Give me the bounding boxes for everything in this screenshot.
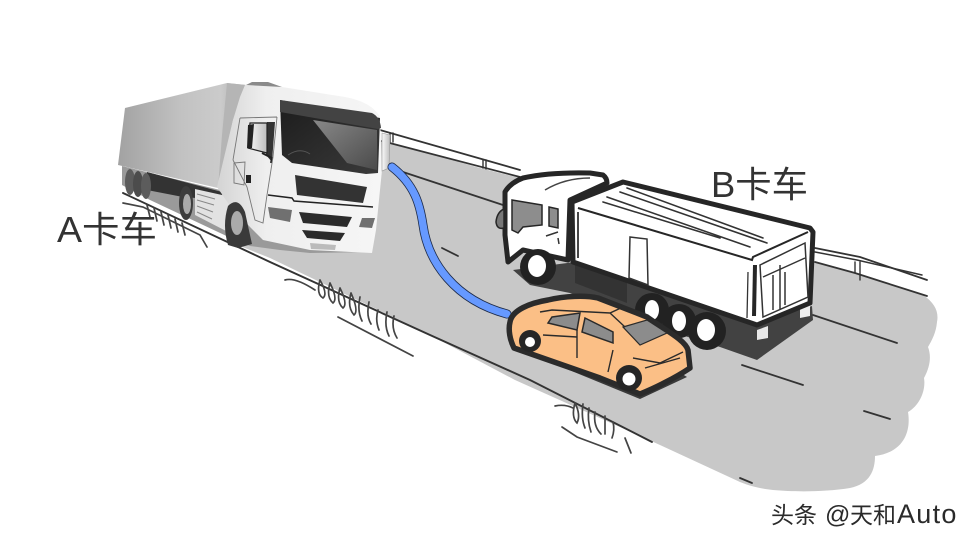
sun visor — [280, 100, 381, 129]
guard rail — [380, 130, 927, 296]
windshield — [280, 100, 380, 174]
car body — [509, 296, 690, 394]
truck B undercarriage — [575, 265, 810, 350]
truck A — [118, 82, 390, 253]
cab roof vent — [246, 82, 282, 87]
truck B box — [572, 182, 813, 325]
watermark: @ — [825, 501, 850, 529]
cab body — [217, 85, 382, 253]
label: truck A: A卡车 — [57, 209, 157, 250]
cab side panel — [218, 83, 246, 188]
car rear wheel — [616, 365, 642, 391]
truck B cab — [496, 173, 607, 285]
right mirror — [382, 133, 390, 171]
trailer box — [118, 83, 246, 188]
steering wheel — [288, 151, 310, 155]
car ground shadow — [513, 345, 687, 399]
truck B — [496, 173, 813, 360]
watermark: Auto — [897, 499, 958, 529]
watermark: 头条 — [771, 502, 817, 528]
tyre skid marks — [123, 203, 631, 453]
front grille — [268, 175, 375, 250]
windshield reflection — [313, 120, 377, 170]
label: truck B: B卡车 — [711, 164, 808, 205]
car detail lines — [540, 307, 683, 372]
car windows — [548, 313, 667, 345]
truck B ground shadow — [513, 262, 813, 360]
blue trajectory arrow — [392, 167, 507, 314]
car front wheel — [519, 330, 541, 352]
door outline — [233, 117, 277, 223]
truck B side door — [629, 237, 648, 285]
orange car — [509, 296, 690, 399]
side window and mirror — [247, 122, 275, 163]
road lane markings — [123, 172, 897, 483]
front wheel — [225, 202, 252, 248]
watermark: 天和 — [850, 502, 896, 528]
truck B rear doors — [760, 243, 808, 317]
road surface — [240, 140, 937, 491]
truck A chassis and rear wheels — [122, 166, 370, 253]
